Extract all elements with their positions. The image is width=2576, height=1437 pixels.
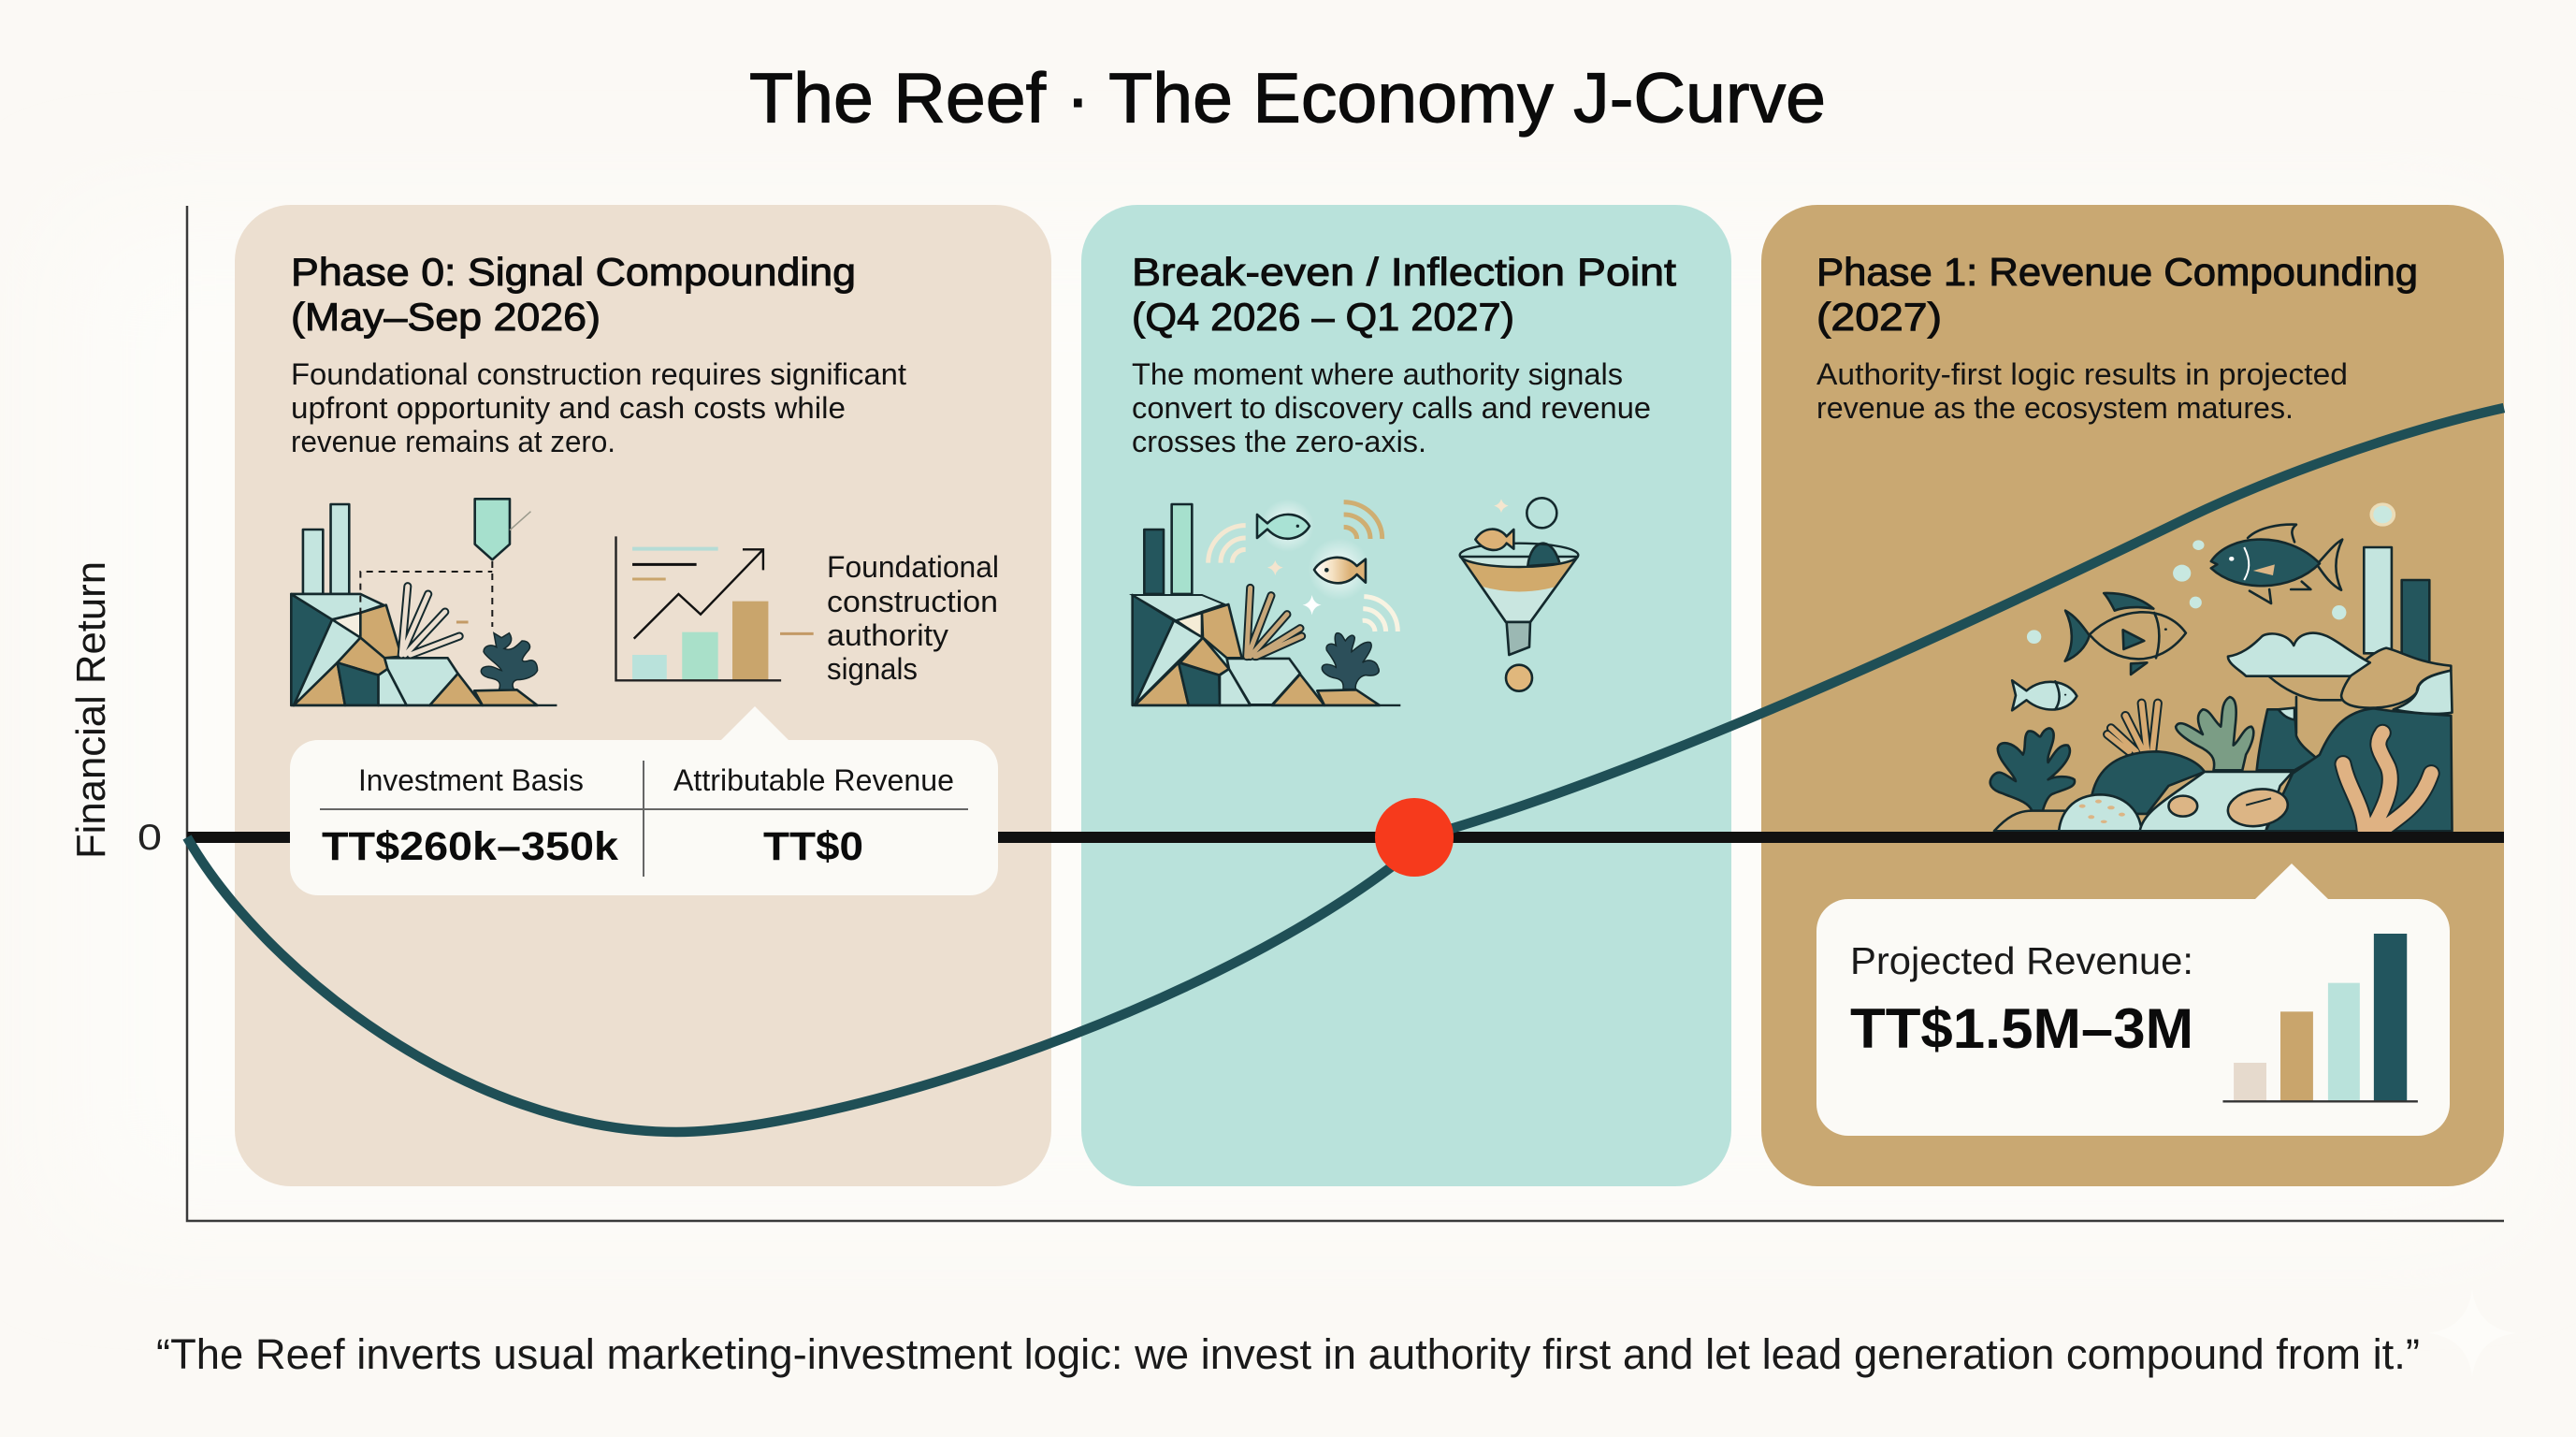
phase 0 heading: Phase 0: Signal Compounding: [291, 250, 856, 294]
icon: reef under construction: [291, 499, 557, 705]
phase 1 heading: [1816, 250, 2418, 339]
zero line: [187, 832, 2504, 843]
phase 0 heading: (May–Sep 2026): [291, 295, 601, 339]
icon: conversion funnel: [1460, 498, 1578, 691]
sparkle watermark: [2428, 1289, 2516, 1377]
panel: phase 1 background: [1761, 205, 2504, 1186]
panel: phase 0 background: [235, 205, 1051, 1186]
phase 0 description: Foundational construction requires significant: [291, 357, 906, 391]
phase 1 description: Authority-first logic results in projected: [1816, 357, 2348, 391]
break-even marker: [1375, 798, 1454, 877]
callout: projected revenue: TT$1.5M–3M: [1850, 997, 2193, 1060]
break-even description: convert to discovery calls and revenue: [1132, 391, 1651, 425]
chart annotation label: [827, 550, 999, 686]
phase 1 heading: Phase 1: Revenue Compounding: [1816, 250, 2418, 294]
callout: projected revenue: Projected Revenue:: [1850, 939, 2193, 982]
phase 1 description: revenue as the ecosystem matures.: [1816, 391, 2294, 425]
callout: projected revenue: [1816, 864, 2450, 1136]
break-even description: The moment where authority signals: [1132, 357, 1623, 391]
phase 1 heading: (2027): [1816, 295, 1942, 339]
chart annotation label: authority: [827, 618, 948, 652]
break-even description: crosses the zero-axis.: [1132, 425, 1426, 458]
icon: small signal chart: [616, 536, 814, 680]
icon: reef with signal fish: [1133, 499, 1400, 705]
y axis and x axis: [187, 206, 2504, 1221]
break-even heading: [1132, 250, 1676, 339]
break-even heading: Break-even / Inflection Point: [1132, 250, 1676, 294]
phase 1 description: [1816, 357, 2348, 425]
phase 0 heading: [291, 250, 856, 339]
revenue mini bar chart: [2222, 934, 2418, 1101]
break-even description: [1132, 357, 1651, 458]
callout: investment basis: Attributable Revenue: [673, 763, 954, 797]
zero tick label: 0: [137, 818, 162, 858]
panel: break-even background: [1081, 205, 1731, 1186]
J-curve line: [187, 408, 2504, 1132]
title: The Reef · The Economy J-Curve: [749, 58, 1826, 137]
break-even heading: (Q4 2026 – Q1 2027): [1132, 295, 1514, 339]
chart annotation label: Foundational: [827, 550, 999, 584]
callout: investment basis: TT$0: [763, 824, 863, 869]
chart annotation label: construction: [827, 585, 998, 618]
phase 0 description: upfront opportunity and cash costs while: [291, 391, 846, 425]
icon: mature reef with fish: [1990, 502, 2453, 831]
callout: investment basis: [290, 706, 998, 895]
callout: investment basis: TT$260k–350k: [322, 824, 618, 869]
y axis label: Financial Return: [68, 561, 114, 859]
closing quote: “The Reef inverts usual marketing-investment logic: we invest in authority first and let lead generation compound from it.”: [156, 1330, 2420, 1378]
phase 0 description: [291, 357, 906, 458]
callout: investment basis: Investment Basis: [358, 763, 584, 797]
chart annotation label: signals: [827, 652, 918, 686]
phase 0 description: revenue remains at zero.: [291, 425, 615, 458]
